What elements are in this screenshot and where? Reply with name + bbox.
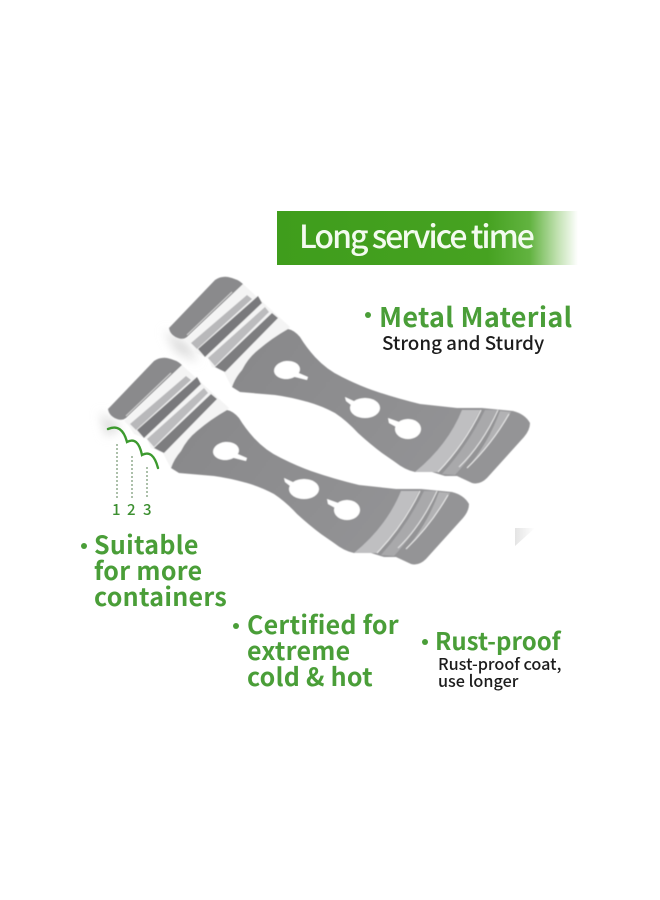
callout: suitable for more containers: [81, 526, 227, 614]
callout heading: for more: [94, 552, 203, 588]
soft shadow front: [100, 412, 122, 436]
callout heading: cold & hot: [247, 658, 373, 694]
callout text: Strong and Sturdy: [382, 329, 544, 356]
callout text: Rust-proof coat,: [438, 651, 561, 675]
callout heading: extreme: [247, 632, 350, 668]
callout text: [438, 651, 561, 692]
banner heading: Long service time: [299, 212, 533, 258]
numbers 1 2 3: 2: [127, 499, 136, 520]
dotted guide lines: [117, 444, 147, 498]
callout heading: Rust-proof: [435, 622, 561, 657]
scallop marker: [108, 428, 158, 468]
banner: long service time: [277, 211, 578, 265]
numbers 1 2 3: 1: [112, 499, 121, 520]
bullet: [81, 543, 87, 549]
faint artefact: [515, 528, 535, 546]
rear wick holder: [169, 277, 530, 483]
bullet: [365, 312, 371, 318]
soft shadow: [164, 330, 198, 362]
callout heading: Metal Material: [379, 296, 572, 335]
numbers 1 2 3: 3: [143, 499, 152, 520]
front wick holder: [108, 358, 469, 564]
numbers 1 2 3: [112, 499, 152, 520]
bullet: [233, 623, 239, 629]
callout heading: containers: [94, 578, 227, 614]
callout heading: Suitable: [94, 526, 199, 562]
callout heading: [94, 526, 227, 614]
callout text: use longer: [438, 668, 518, 692]
bullet: [422, 639, 428, 645]
callout heading: Certified for: [247, 606, 399, 642]
callout: metal material: [365, 296, 572, 356]
callout: certified for extreme cold and hot: [233, 606, 399, 694]
callout heading: [247, 606, 399, 694]
callout: rust-proof: [422, 622, 562, 692]
